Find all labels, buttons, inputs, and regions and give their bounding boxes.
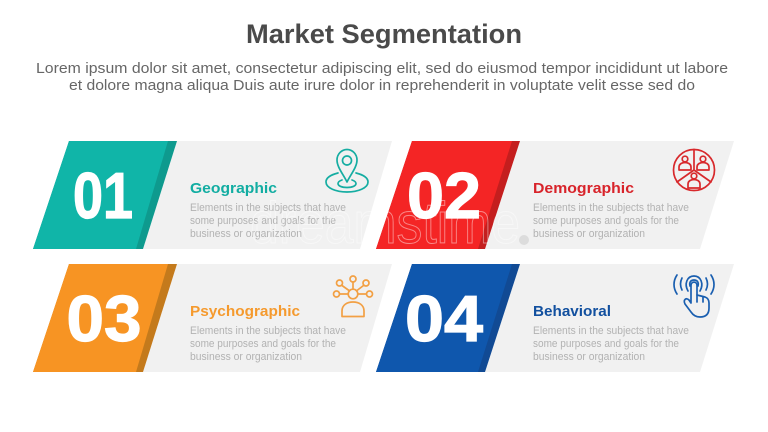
panel: 03 Psychographic	[33, 264, 392, 372]
panel: 03 Psychographic: business or organization	[190, 351, 302, 363]
panel: 02 Demographic: some purposes and goals for the	[533, 215, 679, 227]
icon: hand tapping with signal waves	[674, 275, 714, 317]
panel: 01 Geographic: Geographic	[190, 180, 277, 197]
panel: 02 Demographic: Elements in the subjects that have	[533, 202, 689, 214]
intro text: et dolore magna aliqua Duis aute irure dolor in reprehenderit in voluptate velit esse sed do	[69, 77, 695, 94]
panel: 03 Psychographic: Elements in the subjects that have	[190, 325, 346, 337]
panel: 03 Psychographic: Psychographic	[190, 303, 300, 320]
panel: 04 Behavioral	[376, 264, 734, 372]
panel: 01 Geographic	[33, 141, 392, 249]
panel: 01 Geographic: 01	[73, 159, 133, 232]
icon: person with network nodes	[334, 276, 372, 316]
watermark: dreamstime	[250, 191, 520, 256]
intro text	[36, 60, 728, 94]
panel: 03 Psychographic: some purposes and goals for the	[190, 338, 336, 350]
panel: 04 Behavioral: Behavioral	[533, 303, 611, 320]
panel: 04 Behavioral: 04	[405, 282, 483, 355]
panel: 04 Behavioral: Elements in the subjects that have	[533, 325, 689, 337]
icon: map pin	[326, 150, 368, 192]
title: Market Segmentation	[246, 19, 522, 49]
panel: 01 Geographic: Elements in the subjects that have	[190, 202, 346, 214]
panel: 04 Behavioral: some purposes and goals for the	[533, 338, 679, 350]
panel: 01 Geographic: some purposes and goals for the	[190, 215, 336, 227]
panel: 04 Behavioral: business or organization	[533, 351, 645, 363]
panel: 02 Demographic	[376, 141, 734, 249]
panel: 02 Demographic: 02	[407, 159, 481, 232]
icon: people in segmented circle	[674, 150, 714, 190]
intro text: Lorem ipsum dolor sit amet, consectetur adipiscing elit, sed do eiusmod tempor incididunt ut labore	[36, 60, 728, 77]
panel: 02 Demographic: Demographic	[533, 180, 634, 197]
panel: 01 Geographic: business or organization	[190, 228, 302, 240]
panel: 03 Psychographic: 03	[66, 282, 142, 355]
panel: 02 Demographic: business or organization	[533, 228, 645, 240]
